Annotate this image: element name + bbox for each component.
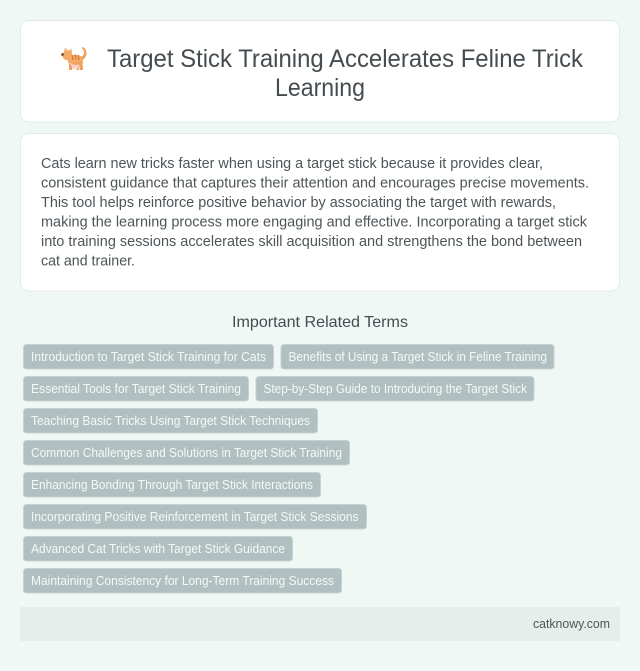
chip: Incorporating Positive Reinforcement in Target Stick Sessions (31, 510, 358, 524)
chip: Maintaining Consistency for Long-Term Training Success (31, 574, 334, 588)
title: Target Stick Training Accelerates Feline Trick (107, 45, 583, 73)
chip: Enhancing Bonding Through Target Stick Interactions (31, 478, 313, 492)
chip (24, 504, 366, 529)
chip (256, 376, 534, 401)
chip: Benefits of Using a Target Stick in Feline Training (288, 350, 547, 364)
chip: Advanced Cat Tricks with Target Stick Guidance (31, 542, 285, 556)
title: Learning (275, 74, 365, 102)
text block: summary: making the learning process more engaging and effective. Incorporating a target stick (41, 214, 587, 230)
chip: Common Challenges and Solutions in Target Stick Training (31, 446, 342, 460)
title (107, 45, 583, 102)
text block: summary: This tool helps reinforce positive behavior by associating the target with rewards, (41, 194, 556, 211)
chip (24, 408, 318, 433)
icon: cat (61, 47, 87, 70)
chip (24, 344, 274, 369)
panel: summary paragraph (20, 134, 620, 291)
footer: catknowy.com (533, 616, 610, 631)
chip (24, 568, 342, 593)
chip (24, 376, 248, 401)
related terms chips (24, 344, 554, 593)
text block: summary: consistent guidance that captures their attention and encourages precise movements. (41, 174, 589, 192)
chip: Essential Tools for Target Stick Training (31, 382, 241, 396)
chip (24, 472, 320, 497)
chip (24, 536, 292, 561)
text block: summary: cat and trainer. (41, 252, 135, 270)
text block: summary: into training sessions accelerates skill acquisition and strengthens the bond between (41, 233, 582, 250)
chip: Step-by-Step Guide to Introducing the Target Stick (264, 382, 528, 396)
text block: summary: Cats learn new tricks faster when using a target stick because it provides clear, (41, 155, 543, 172)
footer (20, 607, 620, 641)
chip (24, 440, 350, 465)
heading: related terms: Important Related Terms (232, 314, 408, 331)
panel: title card (20, 20, 620, 122)
text block: summary (41, 155, 589, 270)
chip (281, 344, 554, 369)
chip: Teaching Basic Tricks Using Target Stick Techniques (31, 414, 310, 428)
chip: Introduction to Target Stick Training for Cats (31, 350, 266, 364)
